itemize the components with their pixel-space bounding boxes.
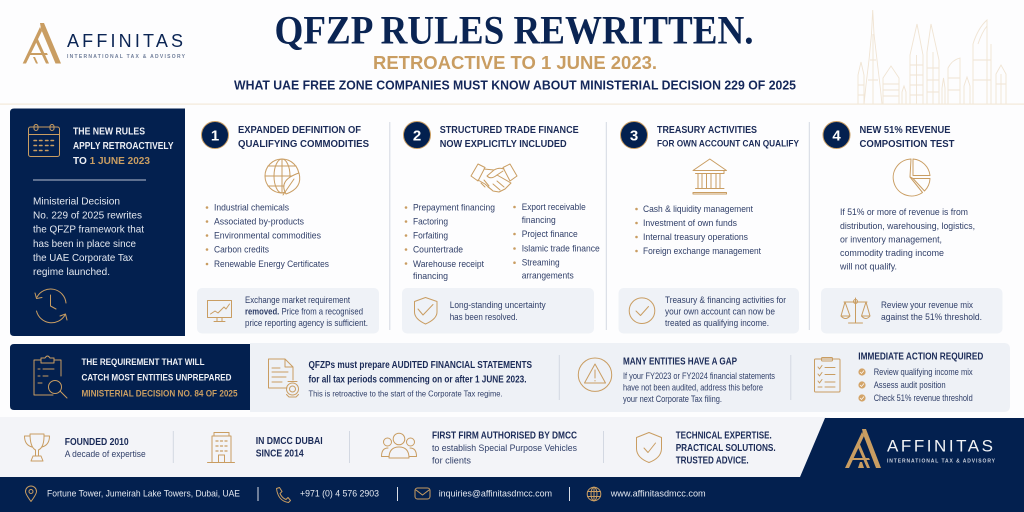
audited statements text: This is retroactive to the start of the Corporate Tax regime. [308,390,502,398]
column 3: treasury activities [618,122,800,334]
bullet list: Foreign exchange management [643,246,761,256]
credential: tagline: PRACTICAL SOLUTIONS. [676,443,776,454]
icon: checklist [814,358,840,392]
navy label panel [10,344,250,410]
callout text [245,295,368,328]
callout text: price reporting agency is sufficient. [245,318,368,328]
heading: TREASURY ACTIVITIES [657,125,757,136]
icon: shield check [414,298,437,324]
bullet list right [513,202,600,280]
immediate action list: Review qualifying income mix [874,367,973,377]
callout text: Treasury & financing activities for [665,295,786,305]
credential: first firm: FIRST FIRM AUTHORISED BY DMCC [432,430,577,442]
immediate action list: Check 51% revenue threshold [874,393,973,403]
column 2: structured trade finance [402,122,600,334]
audited statements text: for all tax periods commencing on or after 1 JUNE 2023. [308,374,527,385]
bullet list left: Prepayment financing [413,202,495,212]
icon: clipboard with magnifier [34,356,67,398]
number badge 3 [620,122,648,148]
icon: shield [636,432,662,462]
subheading: WHAT UAE FREE ZONE COMPANIES MUST KNOW ABOUT MINISTERIAL DECISION 229 OF 2025 [234,78,796,92]
icon: balance scale [841,298,870,323]
number badge 1 [202,122,228,148]
header rule [0,104,1024,105]
heading: EXPANDED DEFINITION OF [238,125,361,136]
number badge 2: 2 [413,128,421,144]
heading: NEW 51% REVENUE [860,125,951,136]
bullet list [635,204,761,256]
heading: NOW EXPLICITLY INCLUDED [440,139,567,150]
callout text: removed. Price from a recognised [245,306,363,316]
credential: first firm: for clients [432,456,471,466]
bullet list left: Forfaiting [413,230,448,240]
skyline illustration [858,10,1006,104]
credentials strip [0,417,830,477]
entity gap text: If your FY2023 or FY2024 financial statements [623,371,775,381]
label text [82,357,238,400]
number badge 2 [404,122,430,148]
contact: address [26,486,240,502]
callout text [881,300,982,322]
credential: first firm: to establish Special Purpose Vehicles [432,443,577,453]
panel body text: Ministerial Decision [33,196,120,208]
bullet list: Internal treasury operations [643,232,748,242]
description text: If 51% or more of revenue is from [840,207,968,217]
bullet list: Cash & liquidity management [643,204,753,214]
icon: globe and leaf [265,159,300,195]
bullet list right: arrangements [522,270,574,280]
number badge 1: 1 [211,128,219,144]
credential: first firm [432,430,577,466]
header logo [23,23,186,64]
footer logo: INTERNATIONAL TAX & ADVISORY [887,458,996,464]
immediate action list: IMMEDIATE ACTION REQUIRED [858,352,983,362]
description text: or inventory management, [840,234,942,244]
navy footer with logo block [0,418,1024,512]
contact: phone [276,488,379,502]
icon: calendar [28,124,60,156]
icon: certificate document [268,359,298,397]
callout text: against the 51% threshold. [881,312,982,322]
panel: retroactive date [10,108,185,336]
contact: phone: +971 (0) 4 576 2903 [300,489,379,499]
column 4: revenue composition test [821,122,1002,334]
panel body text: regime launched. [33,266,110,278]
header logo: INTERNATIONAL TAX & ADVISORY [67,54,186,60]
heading [657,125,800,150]
audited statements text [308,360,532,398]
callout [618,288,799,334]
credential: DMCC: SINCE 2014 [256,448,304,460]
heading: STRUCTURED TRADE FINANCE [440,125,579,136]
icon: office building [208,432,234,462]
bullet list: Associated by-products [214,216,304,226]
description text [839,207,975,272]
bullet list: Renewable Energy Certificates [214,259,329,269]
footer logo: AFFINITAS [887,436,993,456]
icon: monitor chart [208,300,232,322]
icon: trophy [24,434,50,461]
callout text: Review your revenue mix [881,300,973,310]
audited statements text: QFZPs must prepare AUDITED FINANCIAL STATEMENTS [308,360,532,371]
bullet list left: Countertrade [413,244,463,254]
panel body text: the QFZP framework that [33,224,144,236]
bullet list: Environmental commodities [214,230,321,240]
description text: commodity trading income [840,248,944,258]
credential: tagline: TRUSTED ADVICE. [676,456,749,467]
heading: FOR OWN ACCOUNT CAN QUALIFY [657,138,800,150]
footer logo [845,429,996,468]
contact: website [587,487,706,501]
entity gap text [623,356,775,404]
callout [821,288,1002,334]
callout text [450,300,546,322]
icon: pie chart [893,159,930,196]
bullet list right: Project finance [522,229,578,239]
label text: CATCH MOST ENTITIES UNPREPARED [82,372,232,384]
label text: THE REQUIREMENT THAT WILL [82,357,205,368]
number badge 3: 3 [630,128,638,144]
bullet list left [405,202,495,281]
heading: COMPOSITION TEST [860,139,954,150]
bullet list: Investment of own funds [643,218,737,228]
heading [860,125,954,150]
bullet list left: financing [413,271,448,281]
panel body text: the UAE Corporate Tax [33,252,134,264]
description text: distribution, warehousing, logistics, [840,221,975,231]
bullet list left: Factoring [413,216,448,226]
panel body text: has been in place since [33,238,136,250]
bullet list right: Streaming [522,258,560,268]
immediate action list [858,352,983,403]
contact: email: inquiries@affinitasdmcc.com [439,489,552,499]
bullet list: Industrial chemicals [214,202,289,212]
credential: founded [65,437,146,459]
number badge 4 [823,122,850,148]
subtitle: retroactive date: RETROACTIVE TO 1 JUNE 2023. [373,53,657,73]
contact: address: Fortune Tower, Jumeirah Lake Towers, Dubai, UAE [47,489,240,499]
bullet list: Carbon credits [214,244,269,254]
description text: will not qualify. [839,262,897,272]
credential: founded: A decade of expertise [65,449,146,459]
band: audited statements requirement [10,343,1010,412]
bullet list left: Warehouse receipt [413,259,484,269]
column 1: qualifying commodities [197,122,379,334]
panel body text [33,196,144,278]
credential: tagline: TECHNICAL EXPERTISE. [676,430,772,442]
credential: tagline [676,430,776,467]
bullet list right: Export receivable [522,202,586,212]
icon: check circle [629,298,655,324]
callout text [665,295,786,328]
callout [197,288,379,334]
bullet list right: financing [522,215,556,225]
credential: founded: FOUNDED 2010 [65,437,129,448]
credential: DMCC: IN DMCC DUBAI [256,436,323,447]
bullet list [206,202,329,269]
entity gap text: your next Corporate Tax filing. [623,394,722,404]
panel heading: APPLY RETROACTIVELY [73,141,174,152]
panel heading: THE NEW RULES [73,126,145,138]
icon: classical building [693,159,726,194]
heading [440,125,579,150]
credential: DMCC [256,436,323,460]
callout text: Exchange market requirement [245,295,350,305]
callout text: your own account can now be [665,306,775,316]
callout text: has been resolved. [450,312,518,322]
header logo: AFFINITAS [67,31,183,51]
icon: handshake [471,164,517,192]
bullet list right: Islamic trade finance [522,244,600,254]
callout text: Long-standing uncertainty [450,300,546,310]
callout [402,288,594,334]
panel heading [73,126,174,167]
label text: MINISTERIAL DECISION NO. 84 OF 2025 [82,388,238,400]
entity gap text: have not been audited, address this before [623,383,763,393]
icon: clock with arrows [35,289,67,323]
callout text: treated as qualifying income. [665,318,769,328]
contact: website: www.affinitasdmcc.com [610,489,706,499]
icon: warning [578,358,612,391]
immediate action list: Assess audit position [874,380,946,390]
entity gap text: MANY ENTITIES HAVE A GAP [623,356,737,368]
icon: people [382,433,416,458]
number badge 4: 4 [832,128,841,144]
heading: QUALIFYING COMMODITIES [238,139,369,150]
panel heading: TO 1 JUNE 2023 [73,156,151,167]
heading [238,125,369,150]
panel body text: No. 229 of 2025 rewrites [33,210,142,222]
title: QFZP RULES REWRITTEN. [274,7,754,52]
